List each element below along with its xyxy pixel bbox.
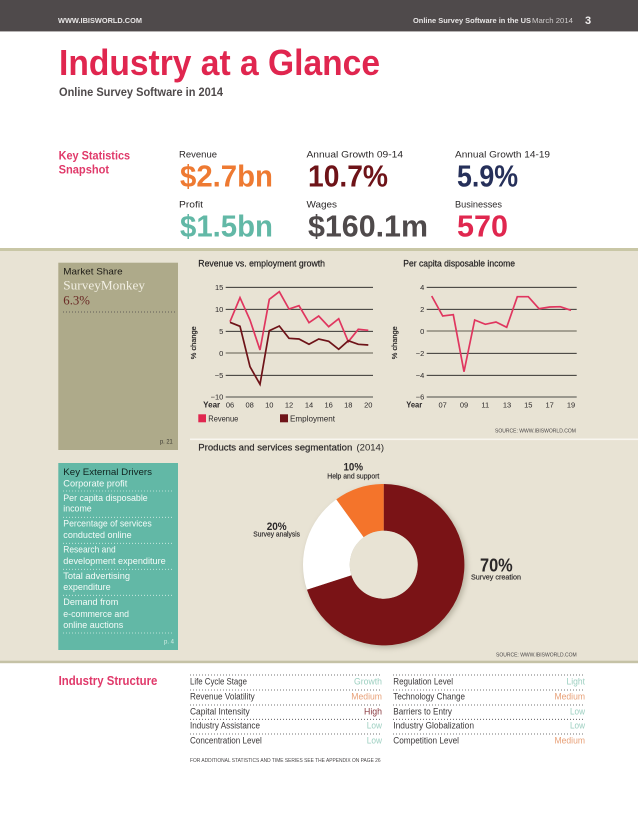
panel: key external drivers: conducted online xyxy=(63,530,132,541)
y axis labels: 0 xyxy=(219,349,223,358)
stat: businesses: 570 xyxy=(457,209,508,244)
x axis labels: 14 xyxy=(305,401,313,410)
header bar: WWW.IBISWORLD.COM xyxy=(58,16,142,25)
label: 20% survey analysis: Survey analysis xyxy=(253,532,300,539)
y axis labels: 0 xyxy=(420,327,424,336)
stat: businesses: Businesses xyxy=(455,200,502,211)
stat: revenue: Revenue xyxy=(179,150,217,161)
stat: annual growth 14-19 xyxy=(455,150,550,194)
table: industry structure right: Low xyxy=(570,721,585,731)
table: industry structure left: High xyxy=(364,706,382,716)
y axis labels: 10 xyxy=(215,305,223,314)
panel: key external drivers: Total advertising xyxy=(63,571,130,582)
key statistics heading: Snapshot xyxy=(59,162,109,176)
stat: profit: $1.5bn xyxy=(180,209,273,244)
label: 20% survey analysis: 20% xyxy=(267,521,287,533)
y axis labels: 4 xyxy=(420,283,424,292)
x axis labels: 19 xyxy=(567,401,575,410)
beige background band xyxy=(0,248,638,663)
panel: key external drivers: income xyxy=(63,504,92,515)
label: 10% help and support: Help and support xyxy=(327,474,379,481)
chart title: Per capita disposable income xyxy=(403,259,515,270)
panel: key external drivers: p. 4 xyxy=(164,638,174,645)
x axis labels: 20 xyxy=(364,401,372,410)
table: industry structure left: Revenue Volatility xyxy=(190,691,255,701)
chart: products and services segmentation xyxy=(198,443,577,659)
table: industry structure left: Growth xyxy=(354,676,382,686)
y axis labels: −6 xyxy=(416,392,424,402)
industry structure heading: Industry Structure xyxy=(59,673,157,688)
y axis labels: −5 xyxy=(215,371,223,380)
y axis labels: 15 xyxy=(215,283,223,292)
stat: annual growth 14-19: 5.9% xyxy=(457,159,518,194)
x axis labels: 11 xyxy=(481,401,489,410)
table: industry structure right: Low xyxy=(570,706,585,716)
panel: key external drivers: e-commerce and xyxy=(63,609,129,620)
x axis labels: 17 xyxy=(546,401,554,410)
stat: wages: $160.1m xyxy=(308,209,428,244)
table: industry structure left: Industry Assistance xyxy=(190,721,260,731)
x axis labels: 13 xyxy=(503,401,511,410)
x axis labels: Year xyxy=(406,401,422,410)
x axis labels: 06 xyxy=(226,401,234,410)
label: 10% help and support: 10% xyxy=(344,462,363,474)
x axis labels xyxy=(406,401,575,410)
x axis labels xyxy=(203,401,372,410)
source: SOURCE: WWW.IBISWORLD.COM xyxy=(496,653,577,659)
chart title: (2014) xyxy=(356,443,384,454)
x axis labels: Year xyxy=(203,401,220,410)
label: 70% survey creation: Survey creation xyxy=(471,575,521,582)
chart: revenue vs employment growth xyxy=(189,259,373,424)
footnote: FOR ADDITIONAL STATISTICS AND TIME SERIES SEE THE APPENDIX ON PAGE 26 xyxy=(190,758,381,764)
header bar: 3 xyxy=(585,15,591,27)
table: industry structure right: Competition Level xyxy=(393,736,459,746)
chart: per capita disposable income xyxy=(390,259,577,434)
panel: key external drivers xyxy=(58,463,178,650)
chart title: Revenue vs. employment growth xyxy=(198,259,325,270)
line: income xyxy=(432,296,571,372)
line: employment xyxy=(230,322,368,384)
panel: key external drivers: expenditure xyxy=(63,582,111,593)
header bar: March 2014 xyxy=(532,16,573,25)
stat: wages: Wages xyxy=(306,200,337,211)
table: industry structure right: Barriers to Entry xyxy=(393,706,452,716)
legend: Employment xyxy=(290,415,336,424)
x axis labels: 16 xyxy=(325,401,333,410)
x axis labels: 07 xyxy=(439,401,447,410)
y axis title: % change xyxy=(390,326,399,359)
table: industry structure right: Medium xyxy=(554,691,585,701)
stat: revenue: $2.7bn xyxy=(180,159,273,194)
table: industry structure left: Low xyxy=(367,721,382,731)
legend xyxy=(198,414,336,424)
stat: profit: Profit xyxy=(179,200,203,211)
panel: key statistics xyxy=(179,150,550,244)
gridlines xyxy=(226,287,373,397)
panel: key external drivers: development expenditure xyxy=(63,556,166,567)
table: industry structure right: Industry Globalization xyxy=(393,721,474,731)
panel: key external drivers: Key External Drivers xyxy=(63,467,152,478)
table: industry structure left: Concentration Level xyxy=(190,736,262,746)
gridlines xyxy=(427,287,577,397)
donut shadow xyxy=(305,486,467,648)
x axis labels: 08 xyxy=(246,401,254,410)
stat: annual growth 09-14: Annual Growth 09-14 xyxy=(306,150,403,161)
panel: market share xyxy=(58,263,178,450)
table: industry structure left: Low xyxy=(367,736,382,746)
panel: key external drivers: Per capita disposable xyxy=(63,493,148,504)
y axis labels: −4 xyxy=(416,371,424,380)
x axis labels: 12 xyxy=(285,401,293,410)
stat: annual growth 14-19: Annual Growth 14-19 xyxy=(455,150,550,161)
line: revenue xyxy=(230,292,368,350)
panel: market share: p. 21 xyxy=(160,439,173,446)
panel: market share: SurveyMonkey xyxy=(63,277,145,292)
panel: key external drivers: Research and xyxy=(63,545,116,556)
table: industry structure right: Regulation Level xyxy=(393,676,453,686)
panel: key external drivers: Percentage of services xyxy=(63,519,152,530)
table: industry structure left: Medium xyxy=(351,691,382,701)
y axis title: % change xyxy=(189,326,198,359)
label: 70% survey creation xyxy=(471,555,521,582)
label: 10% help and support xyxy=(327,462,379,481)
stat: annual growth 09-14: 10.7% xyxy=(308,159,388,194)
x axis labels: 09 xyxy=(460,401,468,410)
title: Industry at a Glance xyxy=(59,42,380,83)
donut xyxy=(303,484,464,645)
y axis labels: −10 xyxy=(211,392,223,402)
y axis labels: −2 xyxy=(416,349,424,358)
panel: key external drivers: Demand from xyxy=(63,597,118,608)
y axis labels xyxy=(211,283,223,402)
table: industry structure right: Light xyxy=(566,676,585,686)
label: 70% survey creation: 70% xyxy=(480,555,513,575)
table: industry structure right: Technology Change xyxy=(393,691,465,701)
key statistics heading: Key Statistics xyxy=(59,148,130,162)
table: industry structure left xyxy=(190,675,382,746)
header bar: Online Survey Software in the US xyxy=(413,16,531,25)
key statistics heading xyxy=(59,148,130,176)
panel: key external drivers: online auctions xyxy=(63,620,124,631)
panel: market share: 6.3% xyxy=(63,292,90,307)
table: industry structure right: Medium xyxy=(554,736,585,746)
table: industry structure right xyxy=(393,675,585,746)
panel: market share: Market Share xyxy=(63,266,123,277)
y axis labels: 2 xyxy=(420,305,424,314)
table: industry structure left: Life Cycle Stage xyxy=(190,676,247,686)
header bar xyxy=(0,0,638,32)
chart title: Products and services segmentation xyxy=(198,443,352,454)
table: industry structure left: Capital Intensity xyxy=(190,706,250,716)
y axis labels xyxy=(416,283,424,402)
label: 20% survey analysis xyxy=(253,521,300,539)
source: SOURCE: WWW.IBISWORLD.COM xyxy=(495,428,576,434)
x axis labels: 10 xyxy=(265,401,273,410)
y axis labels: 5 xyxy=(219,327,223,336)
subtitle: Online Survey Software in 2014 xyxy=(59,87,224,99)
x axis labels: 18 xyxy=(344,401,352,410)
panel: key external drivers: Corporate profit xyxy=(63,478,128,489)
legend: Revenue xyxy=(208,415,239,424)
x axis labels: 15 xyxy=(524,401,532,410)
